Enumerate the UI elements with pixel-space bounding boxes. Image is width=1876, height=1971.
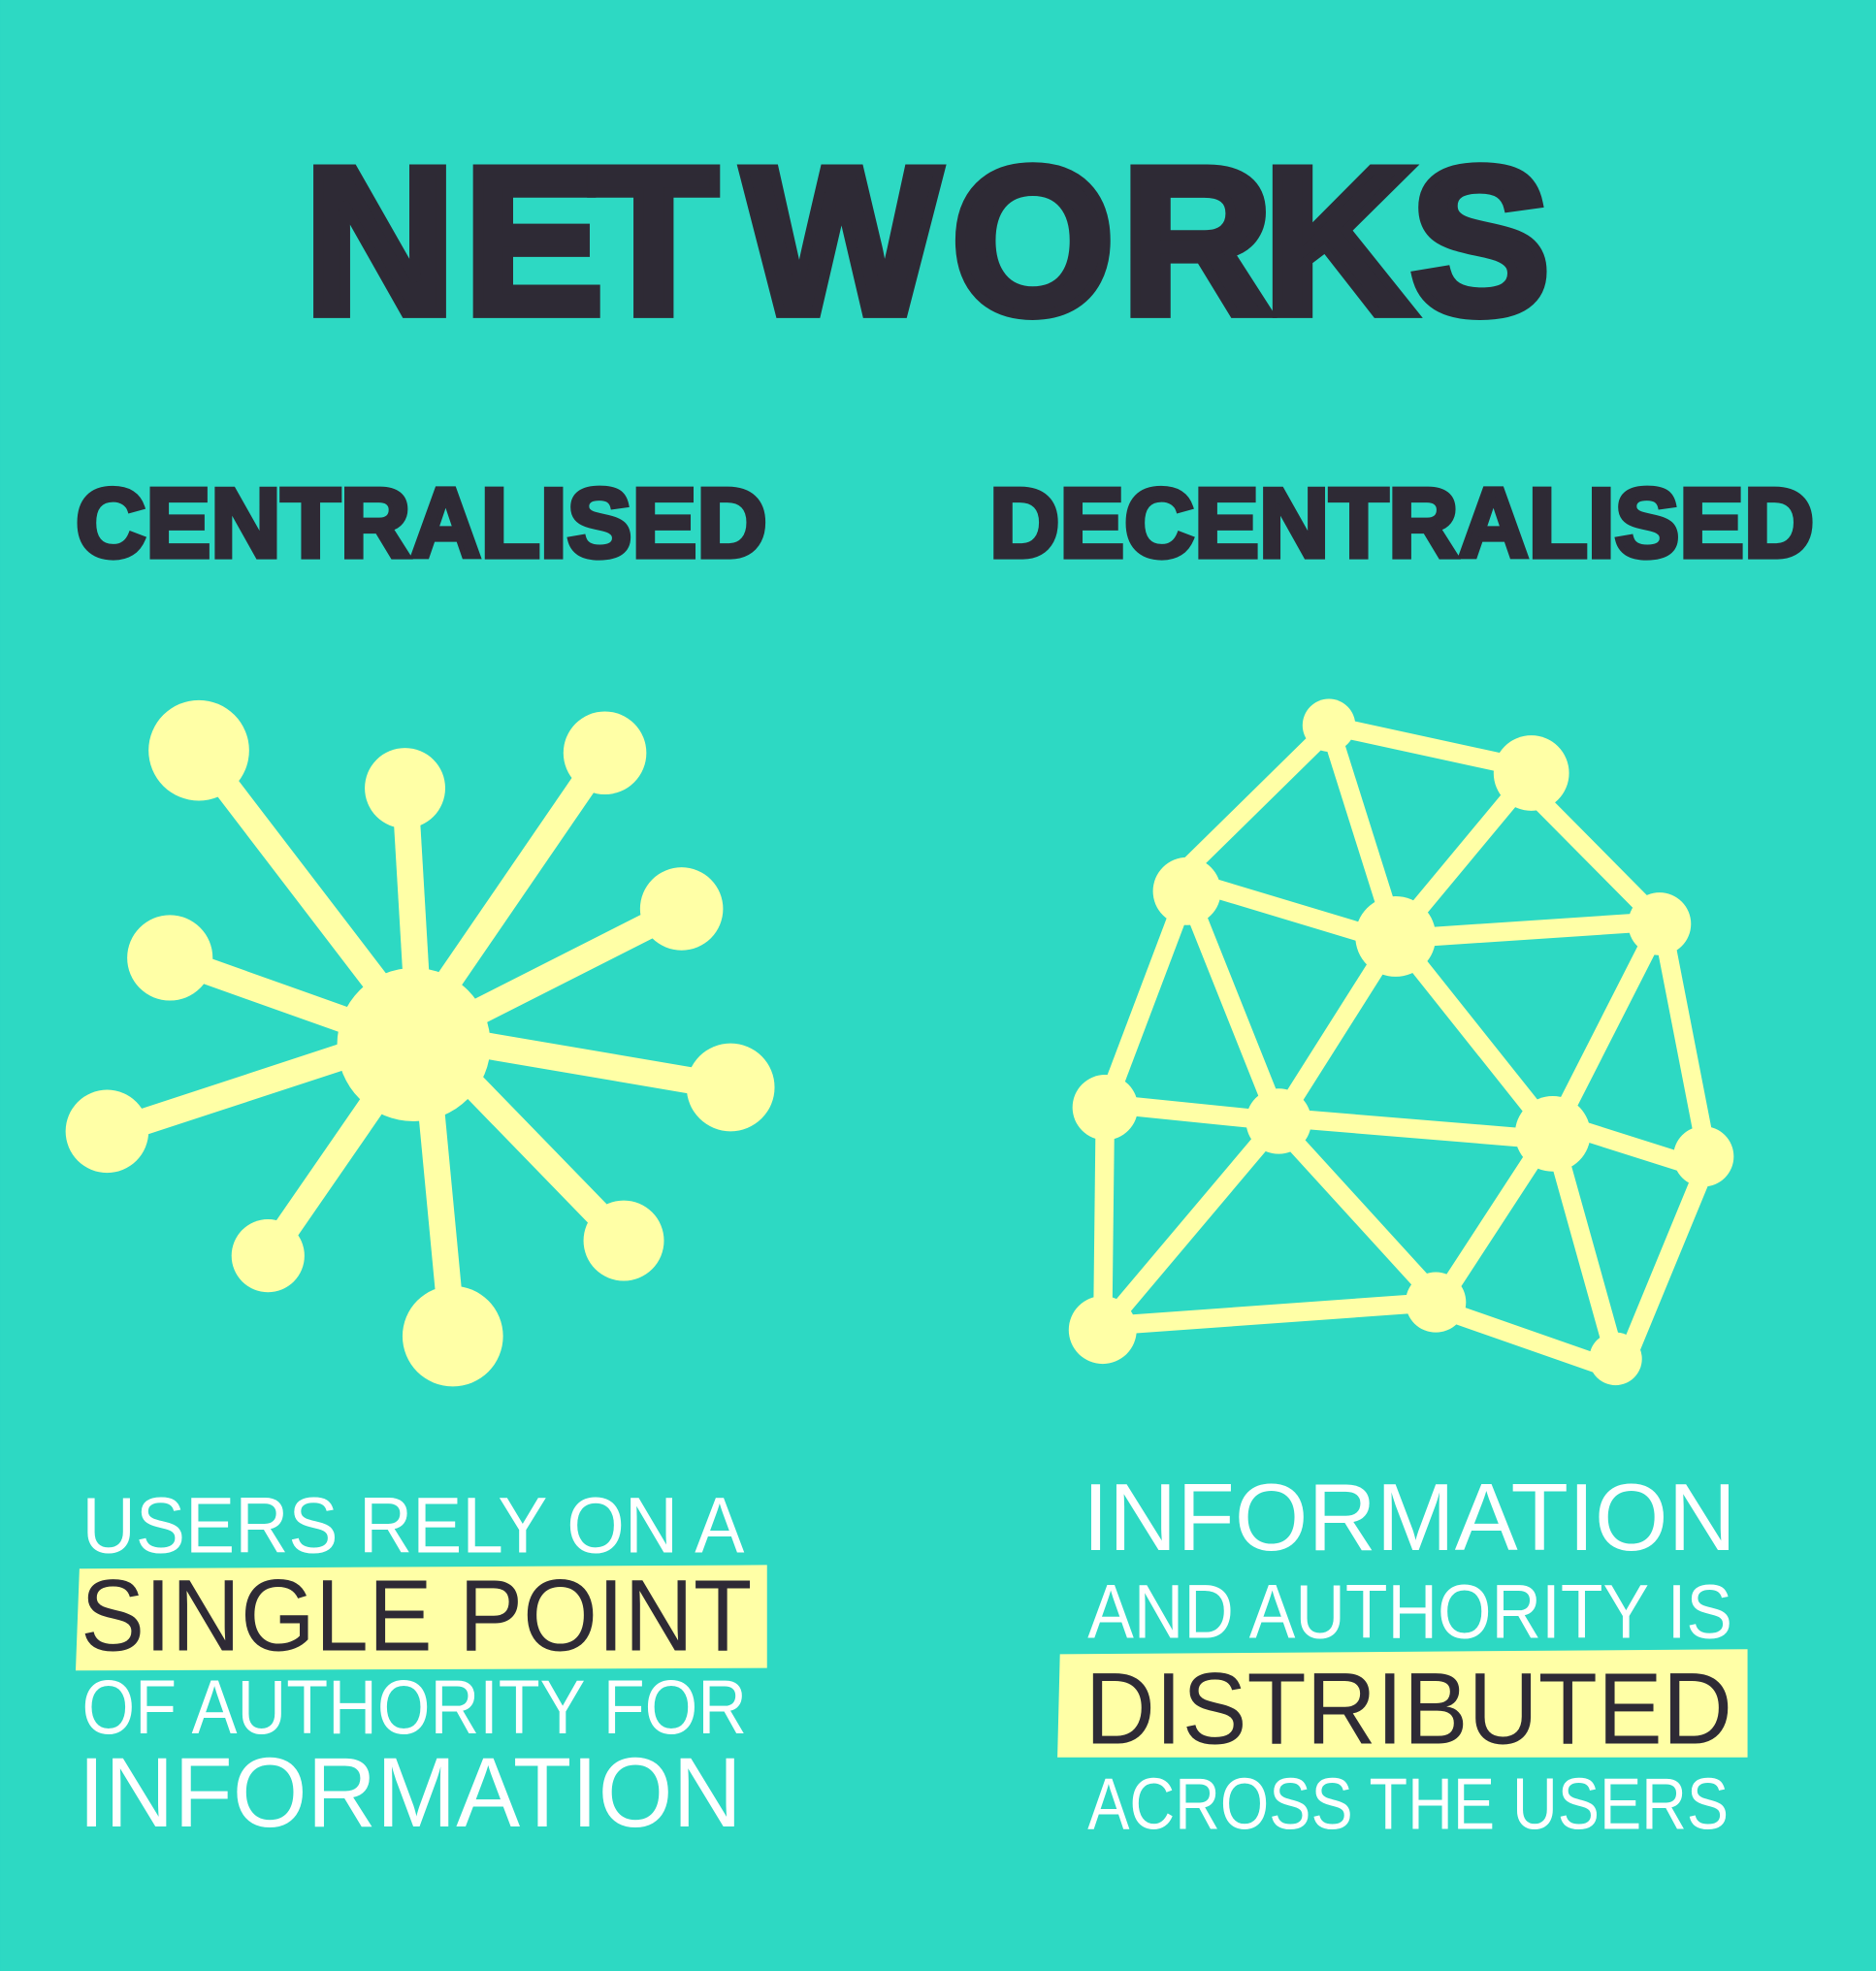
- text block: centralised description: OF AUTHORITY FOR: [81, 1664, 747, 1750]
- text block: centralised description: [76, 1481, 767, 1848]
- text block: decentralised description: INFORMATION: [1083, 1464, 1736, 1570]
- text block: decentralised description: AND AUTHORITY IS: [1087, 1568, 1732, 1655]
- diagram: centralised star network: [66, 700, 775, 1386]
- highlight: single point: [76, 1565, 767, 1670]
- heading: centralised: CENTRALISED: [76, 469, 767, 578]
- text block: decentralised description: [1057, 1464, 1748, 1845]
- text block: centralised description: SINGLE POINT: [81, 1560, 752, 1673]
- text block: centralised description: INFORMATION: [79, 1736, 742, 1848]
- text block: centralised description: USERS RELY ON A: [81, 1481, 745, 1569]
- text block: decentralised description: ACROSS THE USERS: [1087, 1763, 1729, 1845]
- text block: decentralised description: DISTRIBUTED: [1085, 1652, 1732, 1765]
- title: NETWORKS: [305, 124, 1550, 358]
- heading: decentralised: DECENTRALISED: [989, 469, 1814, 578]
- diagram: decentralised mesh network: [1069, 699, 1733, 1385]
- highlight: distributed: [1057, 1649, 1748, 1758]
